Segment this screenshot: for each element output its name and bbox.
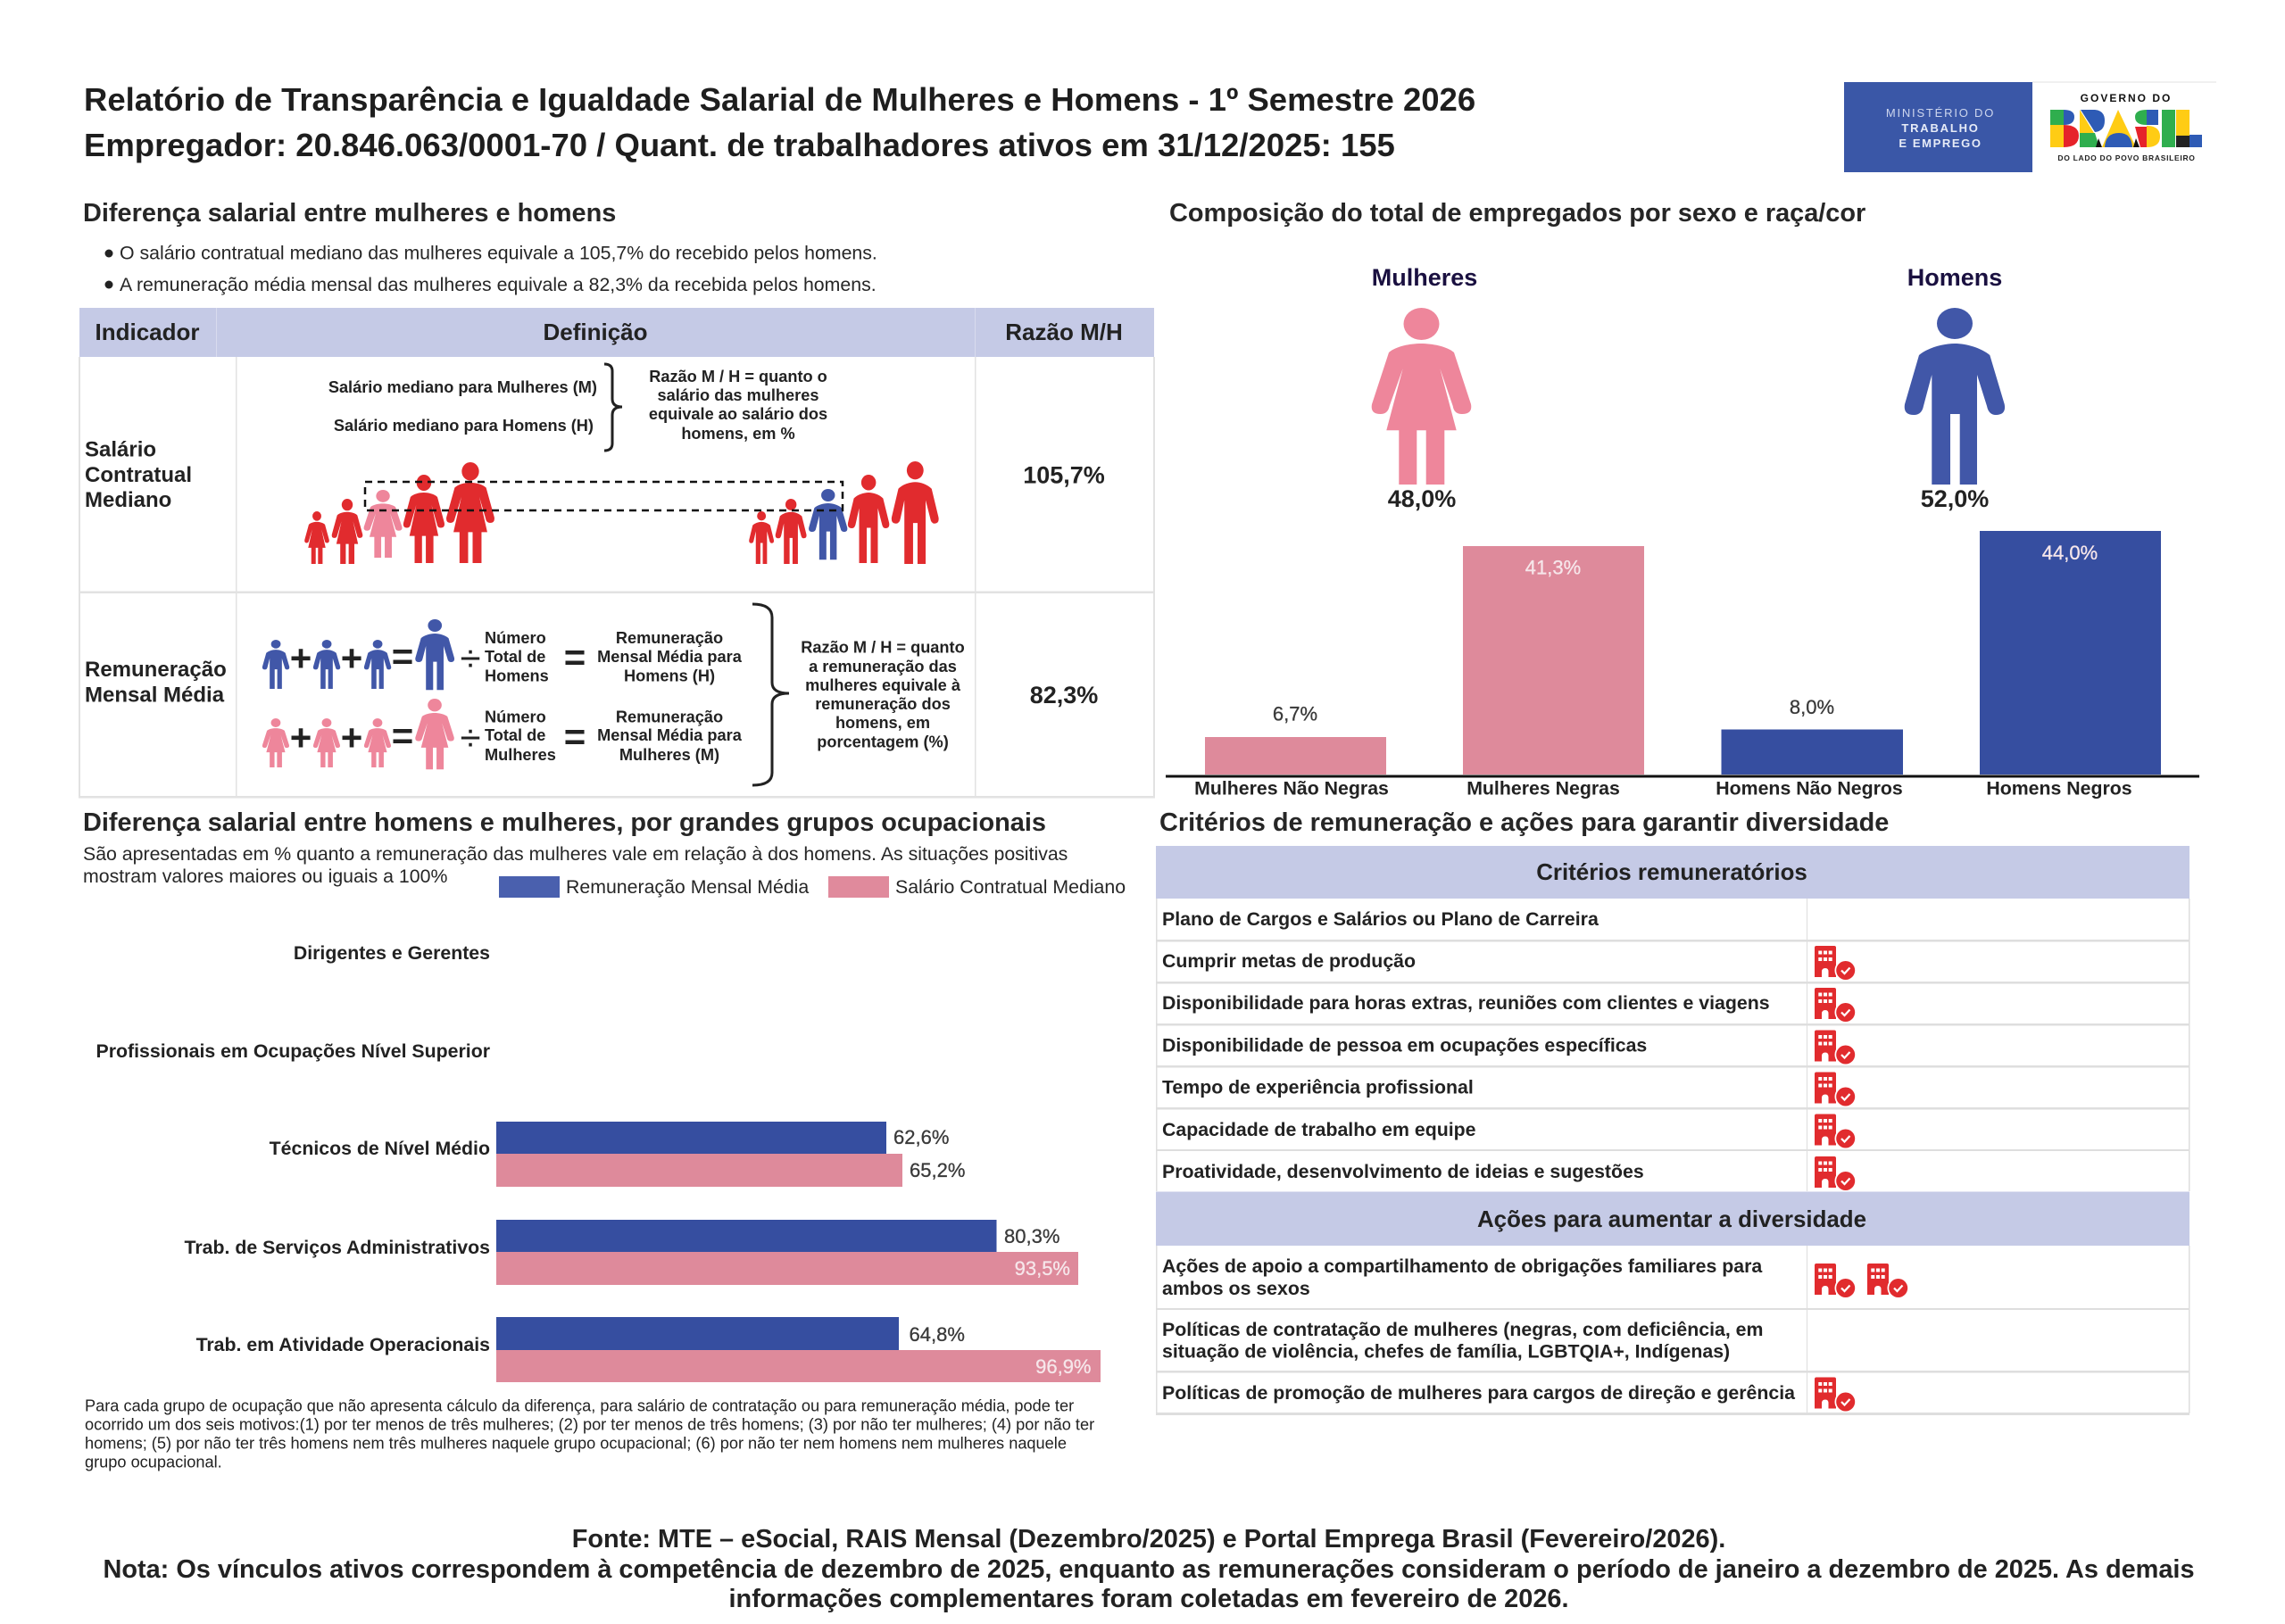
- title: [84, 81, 1475, 163]
- panel: tabela de critérios: Disponibilidade de pessoa em ocupações específicas: [1162, 1035, 1647, 1056]
- bar chart: composição por raça: [1166, 531, 2199, 800]
- bar chart: grupos ocupacionais: Profissionais em Ocupações Nível Superior: [96, 1040, 490, 1062]
- row: salário contratual mediano: equivale ao salário dos: [649, 405, 827, 423]
- row: remuneração mensal média: porcentagem (%): [817, 733, 949, 751]
- panel: tabela de critérios: Cumprir metas de produção: [1162, 950, 1416, 972]
- bar chart: grupos ocupacionais: [96, 942, 1101, 1382]
- logo: ministério e governo do Brasil: E EMPREGO: [1899, 137, 1982, 150]
- panel: tabela de indicadores: Indicador: [95, 319, 200, 345]
- row: remuneração mensal média: remuneração dos: [815, 695, 951, 713]
- row: salário contratual mediano: salário das mulheres: [658, 386, 818, 404]
- panel: tabela de critérios: Proatividade, desenvolvimento de ideias e sugestões: [1162, 1161, 1644, 1182]
- bar chart: composição por raça: 6,7%: [1273, 703, 1317, 725]
- heading: grandes grupos ocupacionais: Diferença salarial entre homens e mulheres, por grandes grupos ocupacionais: [83, 808, 1046, 837]
- row: salário contratual mediano: Salário mediano para Homens (H): [334, 417, 594, 435]
- row: salário contratual mediano: homens, em %: [681, 425, 795, 443]
- row: remuneração mensal média: +: [341, 637, 362, 679]
- row: remuneração mensal média: =: [564, 636, 586, 678]
- bar chart: composição por raça: 41,3%: [1525, 557, 1581, 578]
- row: remuneração mensal média: Mensal Média: [85, 684, 225, 707]
- text block: descrição do gráfico: mostram valores maiores ou iguais a 100%: [83, 866, 447, 887]
- row: remuneração mensal média: Mensal Média para: [597, 648, 743, 666]
- bar chart: grupos ocupacionais: 64,8%: [909, 1323, 965, 1346]
- row: remuneração mensal média: Mulheres (M): [619, 746, 719, 764]
- row: remuneração mensal média: Total de: [485, 648, 545, 666]
- row: salário contratual mediano: Razão M / H = quanto o: [649, 368, 827, 385]
- logo: ministério e governo do Brasil: TRABALHO: [1901, 121, 1980, 135]
- row: salário contratual mediano: 105,7%: [1023, 462, 1105, 489]
- logo: ministério e governo do Brasil: [1844, 81, 2216, 172]
- text block: fonte e nota: Nota: Os vínculos ativos correspondem à competência de dezembro de 2025, enquanto as remunerações consideram o período de janeiro a dezembro de 2025. As demais: [103, 1555, 2195, 1584]
- row: remuneração mensal média: Mulheres: [485, 746, 556, 764]
- row: remuneração mensal média: homens, em: [835, 714, 930, 732]
- row: remuneração mensal média: Homens (H): [624, 667, 715, 685]
- bar chart: grupos ocupacionais: Trab. de Serviços Administrativos: [185, 1237, 490, 1258]
- text block: descrição do gráfico: São apresentadas em % quanto a remuneração das mulheres vale em relação à dos homens. As situações positivas: [83, 843, 1068, 865]
- bar chart: composição por raça: Mulheres Não Negras: [1194, 778, 1389, 800]
- panel: tabela de critérios: Capacidade de trabalho em equipe: [1162, 1119, 1476, 1140]
- logo: ministério e governo do Brasil: MINISTÉRIO DO: [1886, 106, 1995, 120]
- row: remuneração mensal média: [85, 604, 1098, 785]
- icons: empresa com marca de verificação: [1815, 946, 1908, 1413]
- panel: tabela de critérios: Políticas de promoção de mulheres para cargos de direção e gerência: [1162, 1382, 1795, 1404]
- bar chart: composição por raça: Homens Não Negros: [1716, 778, 1903, 800]
- title: Empregador: 20.846.063/0001-70 / Quant. de trabalhadores ativos em 31/12/2025: 155: [84, 127, 1395, 163]
- row: remuneração mensal média: Razão M / H = quanto: [801, 639, 965, 657]
- row: remuneração mensal média: Número: [485, 629, 546, 647]
- bar chart: composição por raça: Homens Negros: [1986, 778, 2132, 800]
- row: salário contratual mediano: [85, 364, 1105, 564]
- bar chart: grupos ocupacionais: 96,9%: [1035, 1355, 1091, 1378]
- legend: Remuneração Mensal Média: [566, 876, 809, 898]
- row: remuneração mensal média: mulheres equivale à: [805, 676, 961, 694]
- heading: composição: Composição do total de empregados por sexo e raça/cor: [1169, 199, 1865, 228]
- bar chart: grupos ocupacionais: Dirigentes e Gerentes: [294, 942, 490, 964]
- row: remuneração mensal média: +: [341, 717, 362, 758]
- bar chart: grupos ocupacionais: 62,6%: [893, 1126, 949, 1148]
- panel: tabela de critérios: Critérios remuneratórios: [1536, 860, 1807, 885]
- panel: tabela de critérios: Políticas de contratação de mulheres (negras, com deficiência, em: [1162, 1319, 1763, 1340]
- row: remuneração mensal média: =: [392, 715, 413, 757]
- panel: tabela de critérios: [1156, 846, 2190, 1415]
- legend: Salário Contratual Mediano: [895, 876, 1126, 898]
- panel: tabela de indicadores: Definição: [543, 319, 648, 345]
- panel: tabela de critérios: Ações de apoio a compartilhamento de obrigações familiares para: [1162, 1255, 1762, 1277]
- text block: nota de rodapé do gráfico: ocorrido um dos seis motivos:(1) por ter menos de três mulheres; (2) por ter menos de três homens; (3) por não ter mulheres; (4) por não ter: [85, 1415, 1094, 1433]
- panel: pictogramas por sexo: 52,0%: [1921, 485, 1989, 512]
- bar chart: grupos ocupacionais: Técnicos de Nível Médio: [270, 1138, 490, 1159]
- row: remuneração mensal média: Total de: [485, 726, 545, 744]
- text block: nota de rodapé do gráfico: grupo ocupacional.: [85, 1453, 222, 1471]
- legend: [499, 876, 1126, 898]
- row: remuneração mensal média: +: [290, 717, 312, 758]
- panel: tabela de critérios: Disponibilidade para horas extras, reuniões com clientes e viagens: [1162, 992, 1770, 1014]
- panel: tabela de critérios: situação de violência, chefes de família, LGBTQIA+, Indígenas): [1162, 1340, 1730, 1362]
- panel: tabela de indicadores: [79, 308, 1155, 798]
- text block: nota de rodapé do gráfico: Para cada grupo de ocupação que não apresenta cálculo da diferença, para salário de contratação ou para remuneração média, pode ter: [85, 1397, 1074, 1415]
- panel: pictogramas por sexo: Mulheres: [1372, 264, 1477, 291]
- bar chart: grupos ocupacionais: 93,5%: [1015, 1257, 1070, 1280]
- bar chart: grupos ocupacionais: 80,3%: [1004, 1225, 1059, 1247]
- panel: tabela de critérios: Ações para aumentar a diversidade: [1477, 1207, 1866, 1232]
- row: remuneração mensal média: Remuneração: [85, 658, 227, 682]
- row: remuneração mensal média: 82,3%: [1030, 682, 1098, 708]
- row: remuneração mensal média: ÷: [460, 717, 481, 758]
- heading: diferença salarial: Diferença salarial entre mulheres e homens: [83, 199, 616, 228]
- row: remuneração mensal média: Remuneração: [616, 629, 723, 647]
- bar chart: composição por raça: 8,0%: [1790, 696, 1834, 718]
- panel: tabela de critérios: Plano de Cargos e Salários ou Plano de Carreira: [1162, 908, 1599, 930]
- row: remuneração mensal média: Homens: [485, 667, 549, 685]
- bullets: resumo: [105, 243, 877, 295]
- text block: nota de rodapé do gráfico: [85, 1397, 1094, 1471]
- row: salário contratual mediano: Salário mediano para Mulheres (M): [328, 378, 597, 396]
- text block: descrição do gráfico: [83, 843, 1068, 887]
- heading: critérios: Critérios de remuneração e ações para garantir diversidade: [1159, 808, 1889, 837]
- row: salário contratual mediano: Mediano: [85, 488, 171, 512]
- text block: fonte e nota: [103, 1525, 2195, 1613]
- panel: tabela de indicadores: Razão M/H: [1005, 319, 1123, 345]
- panel: tabela de critérios: ambos os sexos: [1162, 1278, 1310, 1299]
- panel: pictogramas por sexo: [1372, 264, 2005, 512]
- logo: ministério e governo do Brasil: GOVERNO DO: [2081, 92, 2172, 104]
- text block: fonte e nota: Fonte: MTE – eSocial, RAIS Mensal (Dezembro/2025) e Portal Emprega Brasil (Fevereiro/2026).: [572, 1525, 1725, 1554]
- logo: ministério e governo do Brasil: DO LADO DO POVO BRASILEIRO: [2057, 153, 2196, 162]
- bullets: resumo: O salário contratual mediano das mulheres equivale a 105,7% do recebido pelos homens.: [120, 243, 877, 264]
- row: remuneração mensal média: =: [392, 635, 413, 677]
- row: remuneração mensal média: a remuneração das: [809, 658, 957, 675]
- bullets: resumo: A remuneração média mensal das mulheres equivale a 82,3% da recebida pelos homens.: [120, 274, 877, 295]
- row: remuneração mensal média: Remuneração: [616, 708, 723, 726]
- row: remuneração mensal média: ÷: [460, 637, 481, 679]
- title: Relatório de Transparência e Igualdade Salarial de Mulheres e Homens - 1º Semestre 2026: [84, 81, 1475, 118]
- panel: pictogramas por sexo: 48,0%: [1388, 485, 1456, 512]
- panel: tabela de critérios: Tempo de experiência profissional: [1162, 1076, 1474, 1098]
- bar chart: composição por raça: Mulheres Negras: [1467, 778, 1620, 800]
- bar chart: grupos ocupacionais: Trab. em Atividade Operacionais: [196, 1334, 490, 1355]
- panel: pictogramas por sexo: Homens: [1907, 264, 2002, 291]
- text block: nota de rodapé do gráfico: homens; (5) por não ter três homens nem três mulheres naquele grupo ocupacional; (6) por não ter nem homens nem mulheres naquele: [85, 1435, 1067, 1453]
- bar chart: grupos ocupacionais: 65,2%: [910, 1159, 965, 1181]
- row: remuneração mensal média: Mensal Média para: [597, 726, 743, 744]
- row: remuneração mensal média: =: [564, 716, 586, 758]
- row: remuneração mensal média: +: [290, 637, 312, 679]
- text block: fonte e nota: informações complementares foram coletadas em fevereiro de 2026.: [729, 1585, 1568, 1613]
- row: remuneração mensal média: Número: [485, 708, 546, 726]
- row: salário contratual mediano: Contratual: [85, 463, 192, 487]
- row: salário contratual mediano: Salário: [85, 437, 156, 462]
- bar chart: composição por raça: 44,0%: [2042, 542, 2098, 564]
